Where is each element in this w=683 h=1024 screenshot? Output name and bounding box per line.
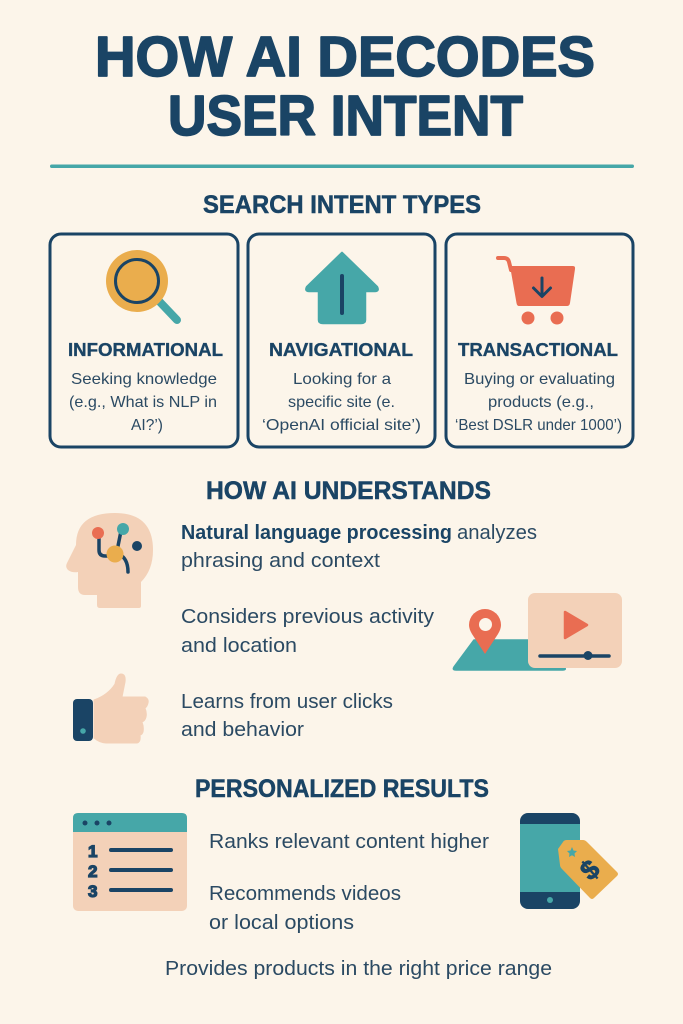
text: previous activity: Considers previous activity (181, 606, 434, 628)
description: navigational (262, 371, 421, 434)
description: informational (69, 371, 217, 434)
icon: ranked list window: 1 (88, 842, 97, 861)
text: recommends videos: Recommends videos (209, 883, 401, 905)
label: transactional: TRANSACTIONAL (458, 339, 618, 360)
icon: ranked list window: 3 (88, 882, 97, 901)
title: HOW AI DECODES (95, 25, 595, 89)
description: transactional: products (e.g., (488, 394, 594, 411)
heading: search intent types: SEARCH INTENT TYPES (203, 191, 481, 219)
label: navigational: NAVIGATIONAL (269, 339, 413, 360)
icon: phone with price tag (520, 813, 618, 909)
description: informational: Seeking knowledge (71, 371, 217, 388)
description: transactional: ‘Best DSLR under 1000’) (455, 417, 622, 434)
description: navigational: specific site (e. (288, 394, 395, 411)
text: natural language processing: analyzes (457, 522, 537, 544)
text: recommends videos: or local options (209, 912, 354, 934)
panel: navigational (248, 234, 435, 447)
description: informational: AI?’) (131, 417, 163, 434)
icon: ranked list window (73, 813, 187, 911)
text: previous activity: and location (181, 635, 297, 657)
icon: thumbs up (73, 674, 148, 743)
panel: informational (50, 234, 238, 447)
heading: how ai understands: HOW AI UNDERSTANDS (206, 477, 491, 505)
text: recommends videos (209, 883, 401, 934)
title: USER INTENT (168, 84, 523, 148)
description: navigational: Looking for a (293, 371, 391, 388)
title (95, 25, 595, 148)
icon: shopping cart (498, 258, 575, 324)
text: user clicks (181, 691, 393, 741)
icon: magnifying glass (106, 250, 177, 320)
description: navigational: ‘OpenAI official site’) (262, 417, 421, 434)
description: informational: (e.g., What is NLP in (69, 394, 217, 411)
icon: head with neural network (66, 513, 153, 608)
description: transactional: Buying or evaluating (464, 371, 615, 388)
text: natural language processing (181, 522, 537, 572)
text: natural language processing: Natural language processing (181, 522, 452, 544)
text: user clicks: Learns from user clicks (181, 691, 393, 713)
label: informational: INFORMATIONAL (68, 339, 223, 360)
icon: up arrow (306, 253, 378, 323)
icon: phone with price tag: $ (574, 854, 606, 886)
text: natural language processing: phrasing and context (181, 550, 380, 572)
icon: ranked list window: 2 (88, 862, 97, 881)
text: price range: Provides products in the right price range (165, 958, 552, 980)
panel: transactional (446, 234, 633, 447)
heading: personalized results: PERSONALIZED RESULTS (195, 775, 489, 803)
text: previous activity (181, 606, 434, 657)
text: user clicks: and behavior (181, 719, 304, 741)
icon: map pin and video player (453, 593, 622, 670)
description: transactional (455, 371, 622, 434)
text: ranks content: Ranks relevant content higher (209, 831, 489, 853)
